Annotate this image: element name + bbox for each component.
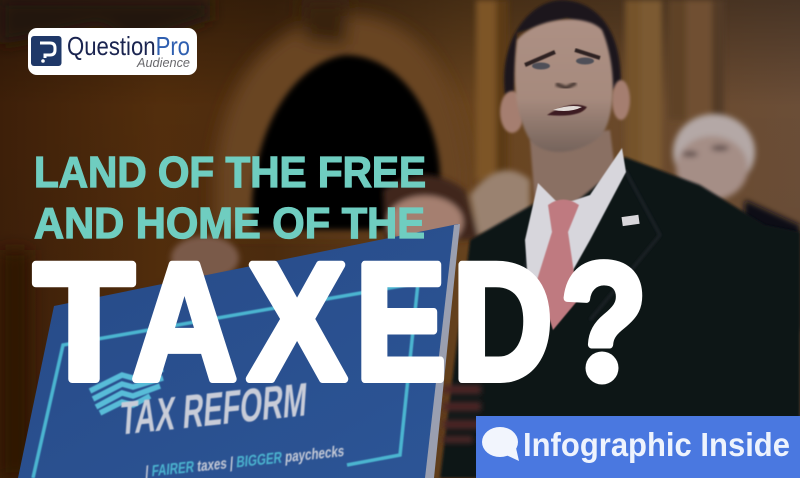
sign panel [18, 224, 458, 478]
sign border [33, 283, 418, 478]
icon: speech bubble [482, 427, 519, 461]
main title [32, 259, 642, 384]
subtitle [34, 148, 426, 248]
lapel pin [622, 215, 640, 226]
tax reform wordmark: TAX REFORM [118, 373, 309, 446]
logo sub-label: Audience [136, 56, 190, 70]
subtitle line 1: LAND OF THE FREE [34, 148, 426, 197]
teeth [553, 106, 582, 111]
suit [440, 157, 800, 478]
podium [443, 385, 481, 443]
logo wordmark: QuestionPro [67, 31, 190, 61]
main title: A [132, 230, 237, 415]
lapel highlights [520, 170, 660, 320]
logo icon [31, 36, 62, 66]
neck [530, 130, 615, 215]
badge label: Infographic Inside [523, 426, 790, 463]
subtitle line 2: AND HOME OF THE [34, 199, 425, 248]
main title: E [356, 230, 446, 415]
person, centre right [470, 170, 530, 235]
sign edge [425, 224, 460, 478]
main title: ? [560, 230, 647, 415]
right ear [612, 80, 630, 120]
person behind sign, centre [383, 175, 480, 240]
main speaker [440, 0, 800, 478]
ears [500, 91, 524, 133]
shirt collar [525, 148, 626, 320]
logo: QuestionPro Audience [28, 28, 197, 75]
sign: tax reform [18, 224, 460, 478]
hair [504, 0, 621, 95]
main title: X [248, 230, 346, 415]
nose shadow [556, 83, 576, 88]
person behind sign, left [171, 236, 239, 280]
background people [171, 114, 800, 330]
main title: D [452, 230, 552, 415]
flag logo [90, 369, 163, 413]
brows and eyes [525, 50, 600, 70]
badge: infographic inside [476, 416, 800, 478]
face [515, 19, 613, 152]
tie [537, 200, 579, 330]
mouth [547, 105, 587, 116]
person in grey hair, far right [673, 114, 755, 190]
main title: T [34, 230, 134, 415]
